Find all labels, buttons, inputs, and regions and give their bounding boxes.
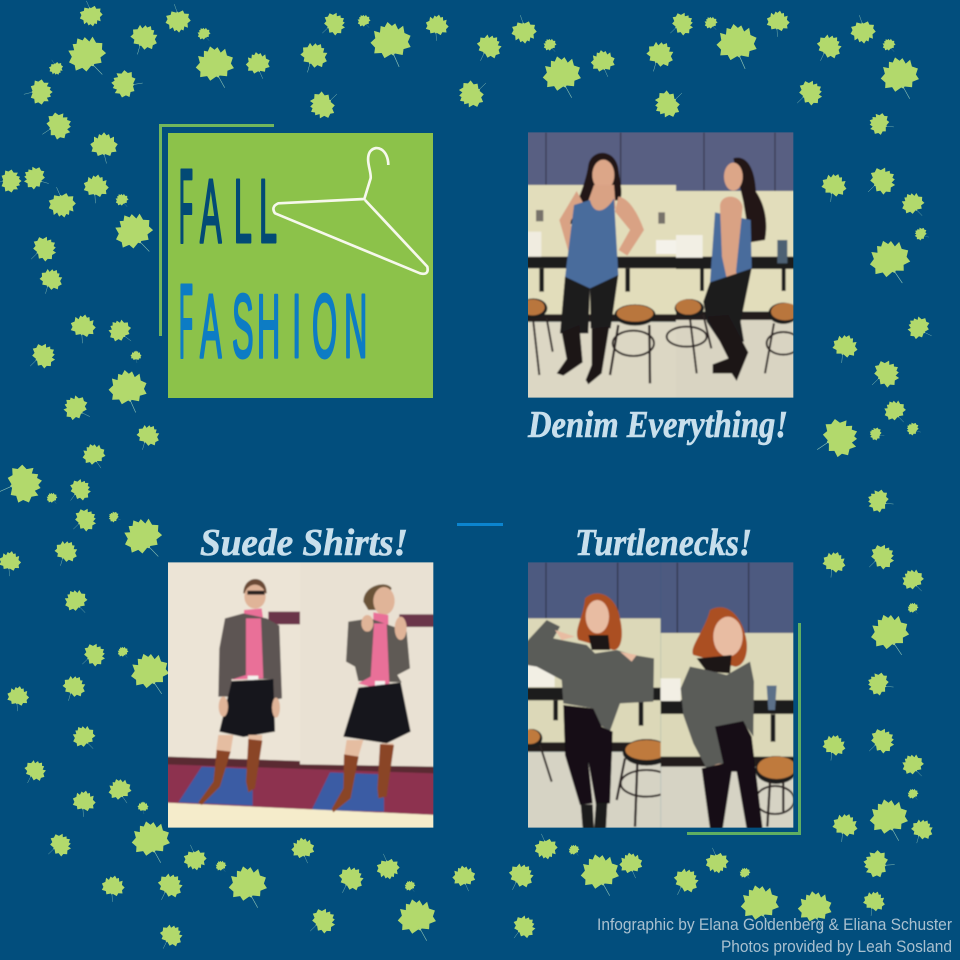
photo frame accent [687, 623, 801, 835]
heading: Fall: ALL [200, 162, 277, 262]
icon: coat hanger [273, 148, 428, 274]
heading: Fashion: ASHION [200, 277, 367, 377]
woman right [363, 584, 392, 610]
center dash accent [457, 523, 503, 526]
heading: Fall [179, 148, 277, 264]
title panel frame accent [159, 124, 274, 336]
woman left [243, 579, 267, 593]
panel: Fall Fashion title [168, 133, 433, 398]
left figure [570, 153, 621, 225]
heading: Fashion: F [179, 263, 193, 379]
credits [597, 915, 952, 956]
photo: Turtlenecks [520, 561, 797, 829]
caption: Turtlenecks!: Turtlenecks! [575, 522, 752, 564]
right figure [733, 158, 766, 242]
photo: Suede Skirts [167, 561, 435, 829]
caption: Suede Shirts!: Suede Shirts! [200, 522, 408, 564]
heading: Fall: F [179, 148, 193, 264]
turtleneck girl left [577, 593, 622, 650]
caption: Denim Everything!: Denim Everything! [527, 404, 788, 446]
turtleneck girl right [692, 607, 747, 667]
photo: Denim Everything [519, 131, 800, 399]
